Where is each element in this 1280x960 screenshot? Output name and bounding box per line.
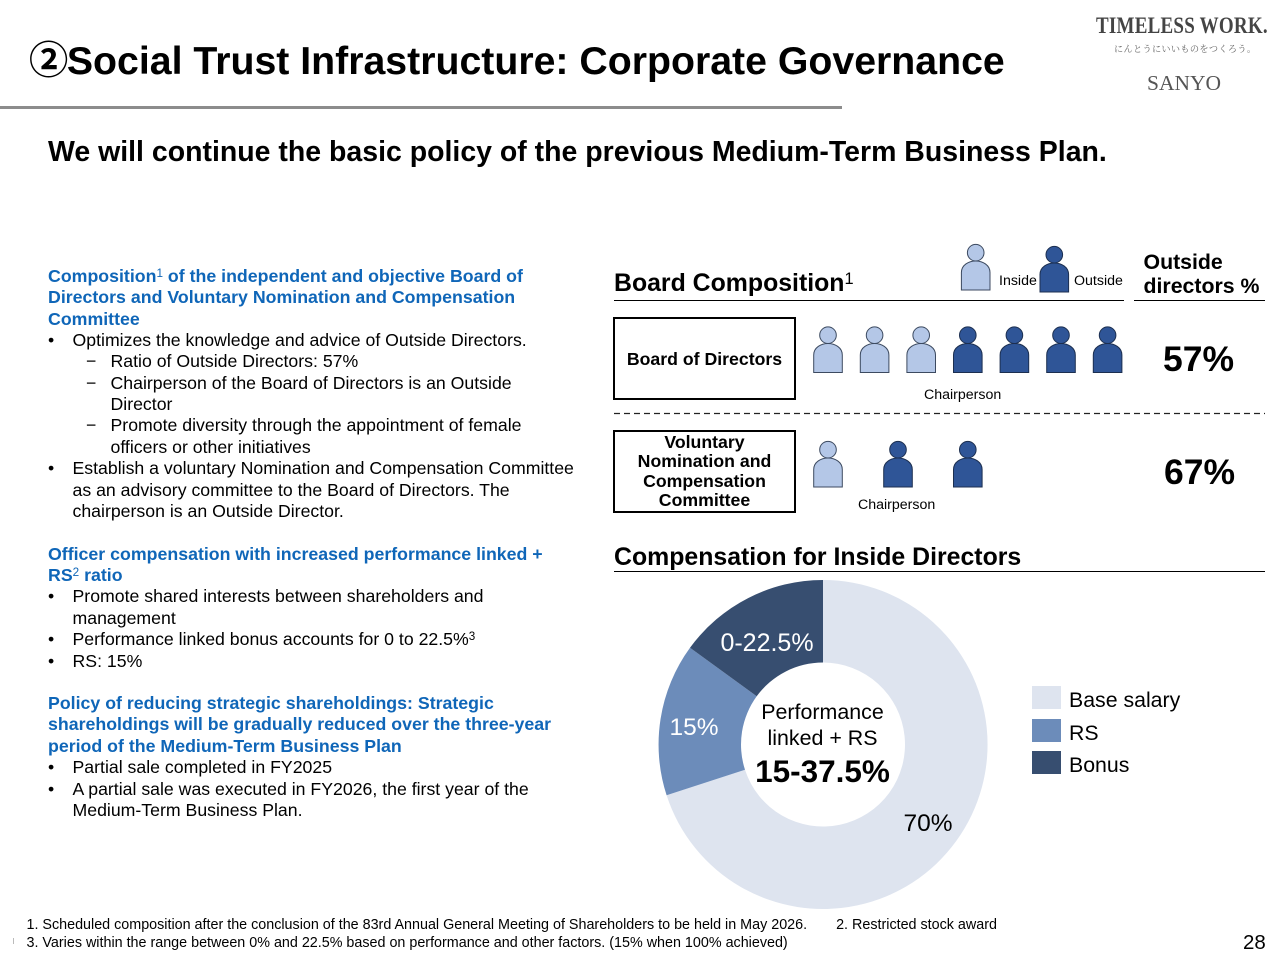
box: board of directors: Board of Directors <box>627 349 782 369</box>
title rule <box>0 106 842 109</box>
label: base salary: 70% <box>903 810 953 837</box>
footnotes: 1. Scheduled composition after the conclusion of the 83rd Annual General Meeting of Shareholders to be held in May 2026. 2. Restricted stock award <box>26 917 997 933</box>
logo: Timeless Work Sanyo: にんとうにいいものをつくろう。 <box>1114 44 1256 54</box>
heading: compensation for inside directors: Compensation for Inside Directors <box>614 544 1021 571</box>
logo: Timeless Work Sanyo: TIMELESS WORK. <box>1096 13 1268 38</box>
icon: legend inside person <box>961 244 990 290</box>
text block: strategic shareholdings: period of the Medium-Term Business Plan <box>48 736 402 756</box>
segment: RS 15% <box>659 648 757 795</box>
label: RS: 15% <box>669 714 719 741</box>
center label <box>755 700 890 789</box>
text block: composition: Directors and Voluntary Nomination and Compensation <box>48 287 515 307</box>
icon: legend outside person <box>1040 246 1069 292</box>
text block: composition: Director <box>110 394 172 414</box>
text block: composition: Chairperson of the Board of Directors is an Outside <box>110 373 512 393</box>
legend item: base salary: Base salary <box>1069 688 1180 712</box>
text block: composition: Committee <box>48 309 140 329</box>
heading: outside directors percent: directors % <box>1144 274 1260 298</box>
legend item: bonus: Bonus <box>1069 753 1129 777</box>
stat: board 57%: 57% <box>1163 339 1234 379</box>
segment: bonus 0-22.5% <box>690 580 823 696</box>
center label: Performance <box>761 700 884 724</box>
segment: base salary 70% <box>667 580 988 909</box>
text block: officer compensation: RS2 ratio <box>48 565 123 585</box>
subtitle: We will continue the basic policy of the previous Medium-Term Business Plan. <box>48 136 1107 168</box>
box: voluntary committee <box>613 430 796 513</box>
legend label: inside: Inside <box>999 273 1037 289</box>
label: committee chairperson: Chairperson <box>858 497 935 513</box>
legend item: base salary <box>1032 686 1180 712</box>
text block: composition: Optimizes the knowledge and advice of Outside Directors. <box>72 330 527 350</box>
board members row <box>814 327 1122 372</box>
text block: strategic shareholdings: shareholdings will be gradually reduced over the three-year <box>48 714 551 734</box>
logo: Timeless Work Sanyo: SANYO <box>1147 71 1221 95</box>
text block: composition: chairperson is an Outside Director. <box>72 501 344 521</box>
heading: board composition: Board Composition1 <box>614 270 854 297</box>
text block: strategic shareholdings: Policy of reducing strategic shareholdings: Strategic <box>48 693 494 713</box>
stat: committee 67%: 67% <box>1164 452 1235 492</box>
text block: composition: as an advisory committee to the Board of Directors. The <box>72 480 510 500</box>
text block: officer compensation: management <box>72 608 176 628</box>
legend item: RS: RS <box>1069 721 1099 745</box>
box: voluntary committee: Committee <box>659 490 750 510</box>
text block: strategic shareholdings: A partial sale was executed in FY2026, the first year of the <box>72 779 529 799</box>
heading: outside directors percent: Outside <box>1144 250 1223 274</box>
text block: officer compensation: Promote shared interests between shareholders and <box>72 586 483 606</box>
footnotes <box>26 917 997 951</box>
compensation rule <box>614 571 1265 572</box>
text block: strategic shareholdings: Partial sale completed in FY2025 <box>72 757 332 777</box>
title: ②Social Trust Infrastructure: Corporate Governance <box>29 39 1005 83</box>
text block: officer compensation: Officer compensation with increased performance linked + <box>48 544 543 564</box>
text block: officer compensation: RS: 15% <box>72 651 142 671</box>
text block: composition: officers or other initiatives <box>110 437 311 457</box>
text block: composition <box>48 266 574 521</box>
text block: strategic shareholdings: Medium-Term Business Plan. <box>72 800 303 820</box>
legend item: bonus <box>1032 751 1129 777</box>
text block: officer compensation <box>48 544 543 671</box>
committee members row <box>814 441 982 487</box>
text block: composition: Composition1 of the independent and objective Board of <box>48 266 523 286</box>
text block: composition: Ratio of Outside Directors: 57% <box>110 351 358 371</box>
donut chart <box>658 580 988 909</box>
text block: composition: Promote diversity through the appointment of female <box>110 415 521 435</box>
text block: strategic shareholdings <box>48 693 551 820</box>
logo: Timeless Work Sanyo <box>1096 13 1268 95</box>
legend: compensation <box>1032 686 1180 777</box>
legend item: RS <box>1032 719 1099 745</box>
text block: officer compensation: Performance linked bonus accounts for 0 to 22.5%3 <box>72 629 475 649</box>
box: voluntary committee: Voluntary <box>664 432 745 452</box>
box: voluntary committee: Compensation <box>643 471 766 491</box>
label: bonus: 0-22.5% <box>720 629 814 657</box>
text block: composition: Establish a voluntary Nomination and Compensation Committee <box>72 458 574 478</box>
center label: linked + RS <box>768 726 877 750</box>
heading: outside directors percent <box>1144 250 1260 298</box>
box: voluntary committee: Nomination and <box>638 451 771 471</box>
label: board chairperson: Chairperson <box>924 387 1001 403</box>
center label: 15-37.5% <box>755 753 890 789</box>
legend label: outside: Outside <box>1074 273 1123 289</box>
footnotes: 3. Varies within the range between 0% and 22.5% based on performance and other factors. (15% when 100% achieved) <box>26 935 788 951</box>
board composition rule <box>614 300 1124 301</box>
outside directors rule <box>1134 300 1265 301</box>
box: board of directors <box>613 317 796 400</box>
page number: 28 <box>1243 931 1266 954</box>
